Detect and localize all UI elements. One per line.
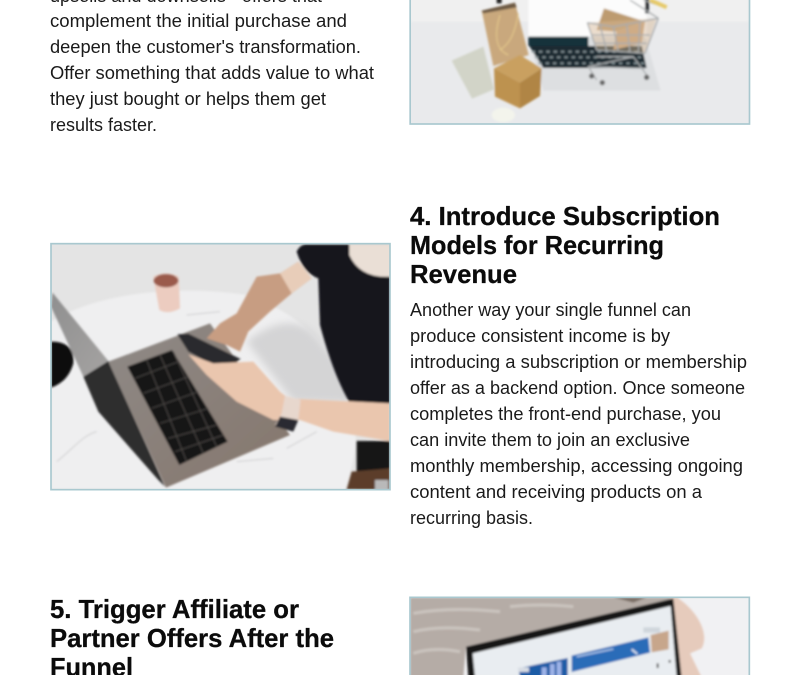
text block: step 4 body: recurring basis. [410, 508, 533, 528]
heading: step 4 [410, 201, 720, 289]
text block: step 4 body: Another way your single funnel can [410, 300, 691, 320]
text block: step 4 body: completes the front-end purchase, you [410, 404, 721, 424]
heading: step 5: 5. Trigger Affiliate or [50, 594, 299, 624]
image: shopping cart and boxes on laptop [410, 0, 749, 124]
heading: step 5 [50, 594, 334, 675]
text block: step 3 body: they just bought or helps them get [50, 89, 326, 109]
text block: step 3 body [50, 0, 374, 135]
heading: step 5: Partner Offers After the [50, 623, 334, 653]
text block: step 4 body [410, 300, 747, 528]
heading: step 4: Revenue [410, 259, 517, 289]
heading: step 4: Models for Recurring [410, 230, 664, 260]
text block: step 3 body: results faster. [50, 115, 157, 135]
text block: step 3 body: deepen the customer's transformation. [50, 37, 361, 57]
text block: step 4 body: monthly membership, accessing ongoing [410, 456, 743, 476]
text block: step 3 body: Offer something that adds value to what [50, 63, 374, 83]
text block: step 3 body: complement the initial purchase and [50, 11, 347, 31]
heading: step 4: 4. Introduce Subscription [410, 201, 720, 231]
text block: step 4 body: introducing a subscription or membership [410, 352, 747, 372]
text block: step 4 body: produce consistent income is by [410, 326, 670, 346]
image: woman using phone and laptop [51, 244, 390, 490]
text block: step 4 body: can invite them to join an exclusive [410, 430, 690, 450]
text block: step 4 body: content and receiving products on a [410, 482, 703, 502]
text block: step 4 body: offer as a backend option. Once someone [410, 378, 745, 398]
image: laptop showing web dashboard [410, 597, 749, 675]
